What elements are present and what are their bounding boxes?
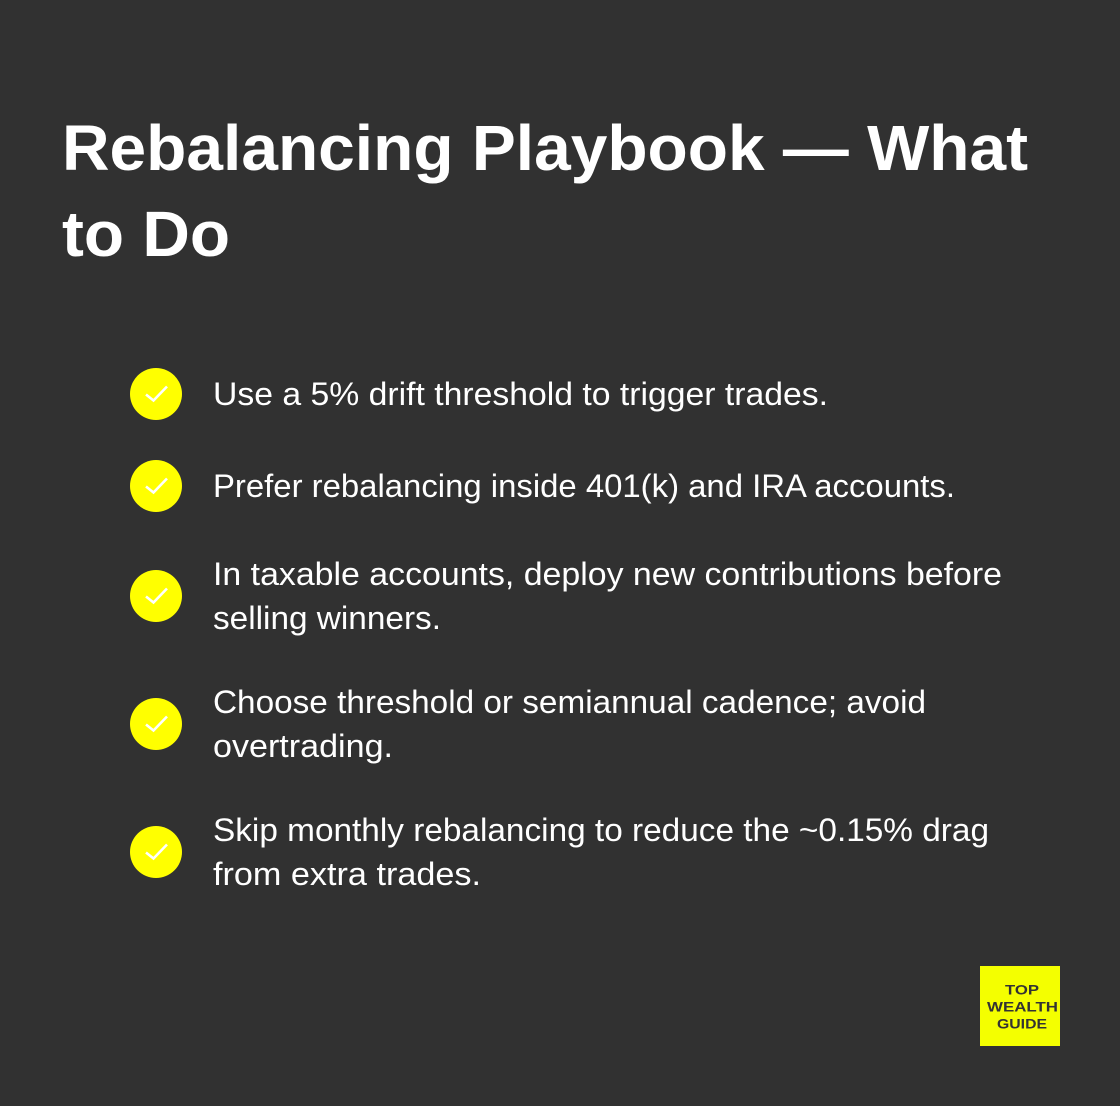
- title: to Do: [62, 198, 230, 270]
- item text: In taxable accounts, deploy new contributions before: [213, 556, 1002, 592]
- icon: check circle: [130, 460, 182, 512]
- item text: Prefer rebalancing inside 401(k) and IRA accounts.: [213, 468, 955, 504]
- icon: check circle: [130, 570, 182, 622]
- title: Rebalancing Playbook — What: [62, 112, 1028, 184]
- item text: selling winners.: [213, 600, 441, 636]
- item 4: [130, 684, 926, 764]
- item 5: [130, 812, 989, 892]
- item 3: [130, 556, 1002, 636]
- item text: [213, 812, 989, 892]
- logo: Top Wealth Guide: WEALTH: [987, 998, 1058, 1014]
- icon: check circle: [130, 368, 182, 420]
- icon: check circle: [130, 826, 182, 878]
- item text: [213, 556, 1002, 636]
- item text: Use a 5% drift threshold to trigger trades.: [213, 376, 828, 412]
- logo: Top Wealth Guide: GUIDE: [997, 1016, 1047, 1032]
- checklist: [130, 368, 1002, 892]
- item text: Skip monthly rebalancing to reduce the ~0.15% drag: [213, 812, 989, 848]
- icon: check circle: [130, 698, 182, 750]
- item text: from extra trades.: [213, 856, 481, 892]
- logo: Top Wealth Guide: TOP: [1005, 982, 1039, 998]
- logo: Top Wealth Guide: [980, 966, 1060, 1046]
- title: [62, 112, 1028, 270]
- item 2: [130, 460, 955, 512]
- item text: Choose threshold or semiannual cadence; avoid: [213, 684, 926, 720]
- item 1: [130, 368, 828, 420]
- item text: overtrading.: [213, 728, 393, 764]
- item text: [213, 684, 926, 764]
